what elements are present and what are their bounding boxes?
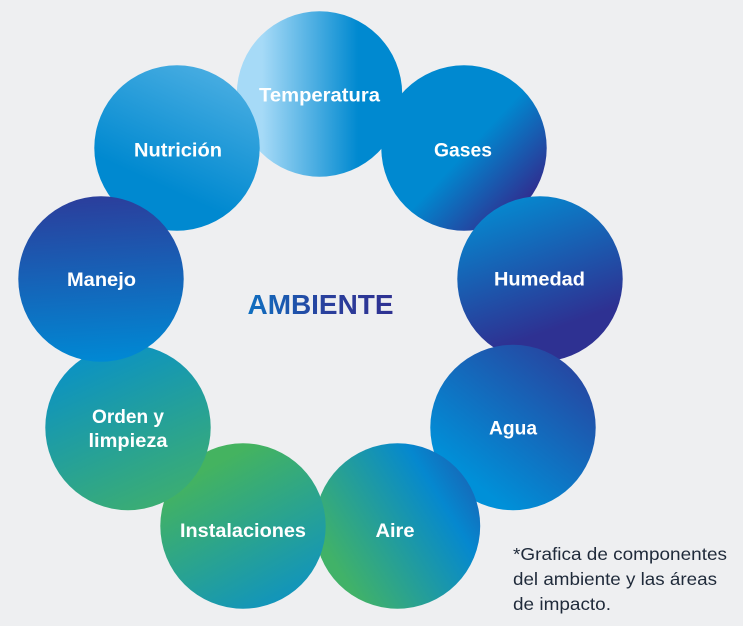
circle: Orden y limpieza (45, 345, 211, 510)
footnote: del ambiente y las áreas (513, 569, 717, 589)
label: Orden y limpieza (88, 407, 168, 452)
circle: Nutrición (94, 65, 260, 231)
label: Orden y limpieza: limpieza (88, 431, 168, 452)
circle: Aire (315, 443, 480, 609)
label: Temperatura: Temperatura (259, 86, 380, 106)
label: Humedad: Humedad (494, 270, 585, 290)
label: Gases: Gases (434, 140, 492, 162)
label: Nutrición: Nutrición (134, 140, 222, 162)
circle: Instalaciones (160, 443, 326, 609)
circle: Temperatura (237, 11, 402, 177)
label: Orden y limpieza: Orden y (92, 407, 164, 428)
label: Manejo: Manejo (67, 270, 136, 291)
label: Instalaciones: Instalaciones (180, 521, 306, 542)
footnote: *Grafica de componentes (513, 544, 727, 564)
circle: Gases (381, 65, 547, 231)
circle: Humedad (457, 196, 623, 362)
circle: Manejo (18, 196, 184, 362)
center title: AMBIENTE: AMBIENTE (248, 289, 394, 320)
footnote: de impacto. (513, 594, 611, 614)
label: Aire: Aire (376, 521, 414, 542)
footnote (513, 544, 727, 614)
circle: Agua (430, 345, 596, 510)
label: Agua: Agua (489, 418, 537, 440)
